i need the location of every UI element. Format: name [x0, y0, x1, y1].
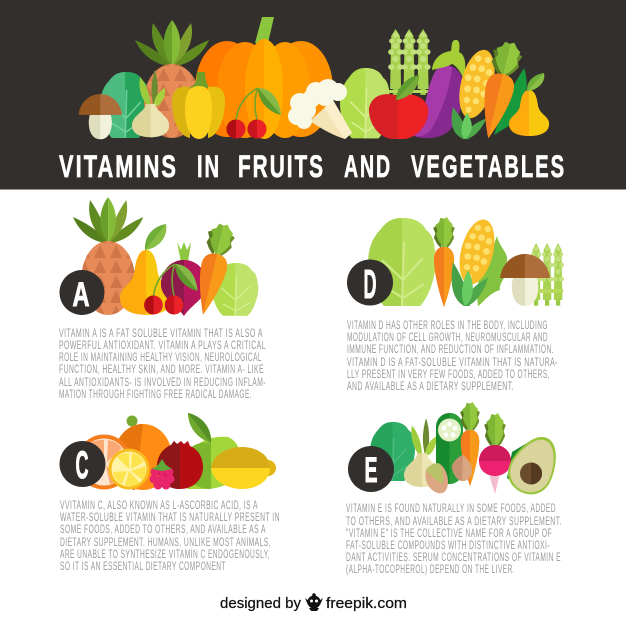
icon: vitamin C food group — [76, 413, 276, 490]
icon: jagged green leaf — [494, 68, 527, 135]
icon: cherries — [226, 88, 281, 138]
text: vitamin C description: DIETARY SUPPLEMENT. HUMANS, UNLIKE MOST ANIMALS, — [60, 535, 271, 549]
icon: pineapple — [135, 20, 209, 138]
icon: red apple — [369, 75, 428, 139]
icon: eggplant — [412, 40, 465, 138]
text: vitamin A description: MATION THROUGH FIGHTING FREE RADICAL DAMAGE. — [59, 387, 252, 401]
icon: vitamin E food group — [370, 402, 567, 502]
icon: cauliflower — [288, 79, 352, 139]
icon: yellow pepper — [172, 72, 225, 139]
icon: dark green lettuce — [100, 72, 150, 138]
text: vitamin C description: SOME FOODS, ADDED TO OTHERS, AND AVAILABLE AS A — [60, 522, 266, 536]
text: vitamin D description — [347, 318, 558, 393]
text: vitamin A description: FUNCTION, HEALTHY SKIN, AND MORE. VITAMIN A- LIKE — [59, 362, 264, 376]
text: vitamin C description: SO IT IS AN ESSENTIAL DIETARY COMPONENT — [60, 559, 226, 573]
icon: corn with husk — [452, 46, 501, 139]
icon: carrot — [474, 38, 525, 142]
badge: C — [60, 441, 106, 487]
footer: credit: designed by — [220, 596, 302, 612]
icon: vitamin A food group — [73, 197, 258, 318]
footer: credit: freepik.com — [326, 596, 407, 612]
icon: pear — [509, 73, 549, 136]
panel: vitamin E — [346, 402, 567, 576]
icon: onion — [132, 70, 169, 137]
panel: vitamin D — [347, 216, 564, 393]
badge: E — [348, 446, 394, 492]
text: vitamin C description — [60, 498, 280, 573]
title: IN — [197, 148, 221, 184]
header band — [0, 0, 626, 190]
text: vitamin A description — [59, 326, 266, 401]
badge: A — [60, 270, 104, 315]
icon: asparagus — [388, 29, 431, 95]
badge: A: A — [72, 276, 90, 314]
text: vitamin A description: ALL ANTIOXIDANTS- IS INVOLVED IN REDUCING INFLAM- — [59, 375, 266, 389]
badge: C: C — [76, 444, 88, 487]
icon: pumpkin — [195, 17, 333, 139]
icon: mushroom — [78, 94, 122, 139]
text: vitamin A description: VITAMIN A IS A FAT SOLUBLE VITAMIN THAT IS ALSO A — [59, 326, 263, 340]
text: vitamin C description: WATER-SOLUBLE VITAMIN THAT IS NATURALLY PRESENT IN — [60, 510, 280, 524]
panel: vitamin A — [59, 197, 266, 401]
text: vitamin A description: ROLE IN MAINTAINING HEALTHY VISION, NEUROLOGICAL — [59, 350, 262, 364]
icon: freepik logo — [305, 593, 323, 611]
panel: vitamin C — [60, 413, 280, 573]
icon: light green lettuce — [340, 68, 390, 138]
text: vitamin E description — [346, 501, 562, 576]
title: AND — [344, 148, 392, 184]
text: vitamin C description: ARE UNABLE TO SYNTHESIZE VITAMIN C ENDOGENOUSLY, — [60, 547, 270, 561]
title: FRUITS — [238, 148, 325, 184]
badge: D: D — [364, 261, 376, 307]
text: vitamin C description: VVITAMIN C, ALSO KNOWN AS L-ASCORBIC ACID, IS A — [60, 498, 258, 512]
icon: vitamin D food group — [368, 216, 564, 307]
badge: E: E — [364, 451, 378, 490]
footer: credit — [220, 593, 407, 612]
title — [59, 148, 566, 184]
title: VITAMINS — [59, 148, 178, 184]
text: vitamin A description: POWERFUL ANTIOXIDANT. VITAMIN A PLAYS A CRITICAL — [59, 338, 266, 352]
badge: D — [347, 260, 393, 307]
